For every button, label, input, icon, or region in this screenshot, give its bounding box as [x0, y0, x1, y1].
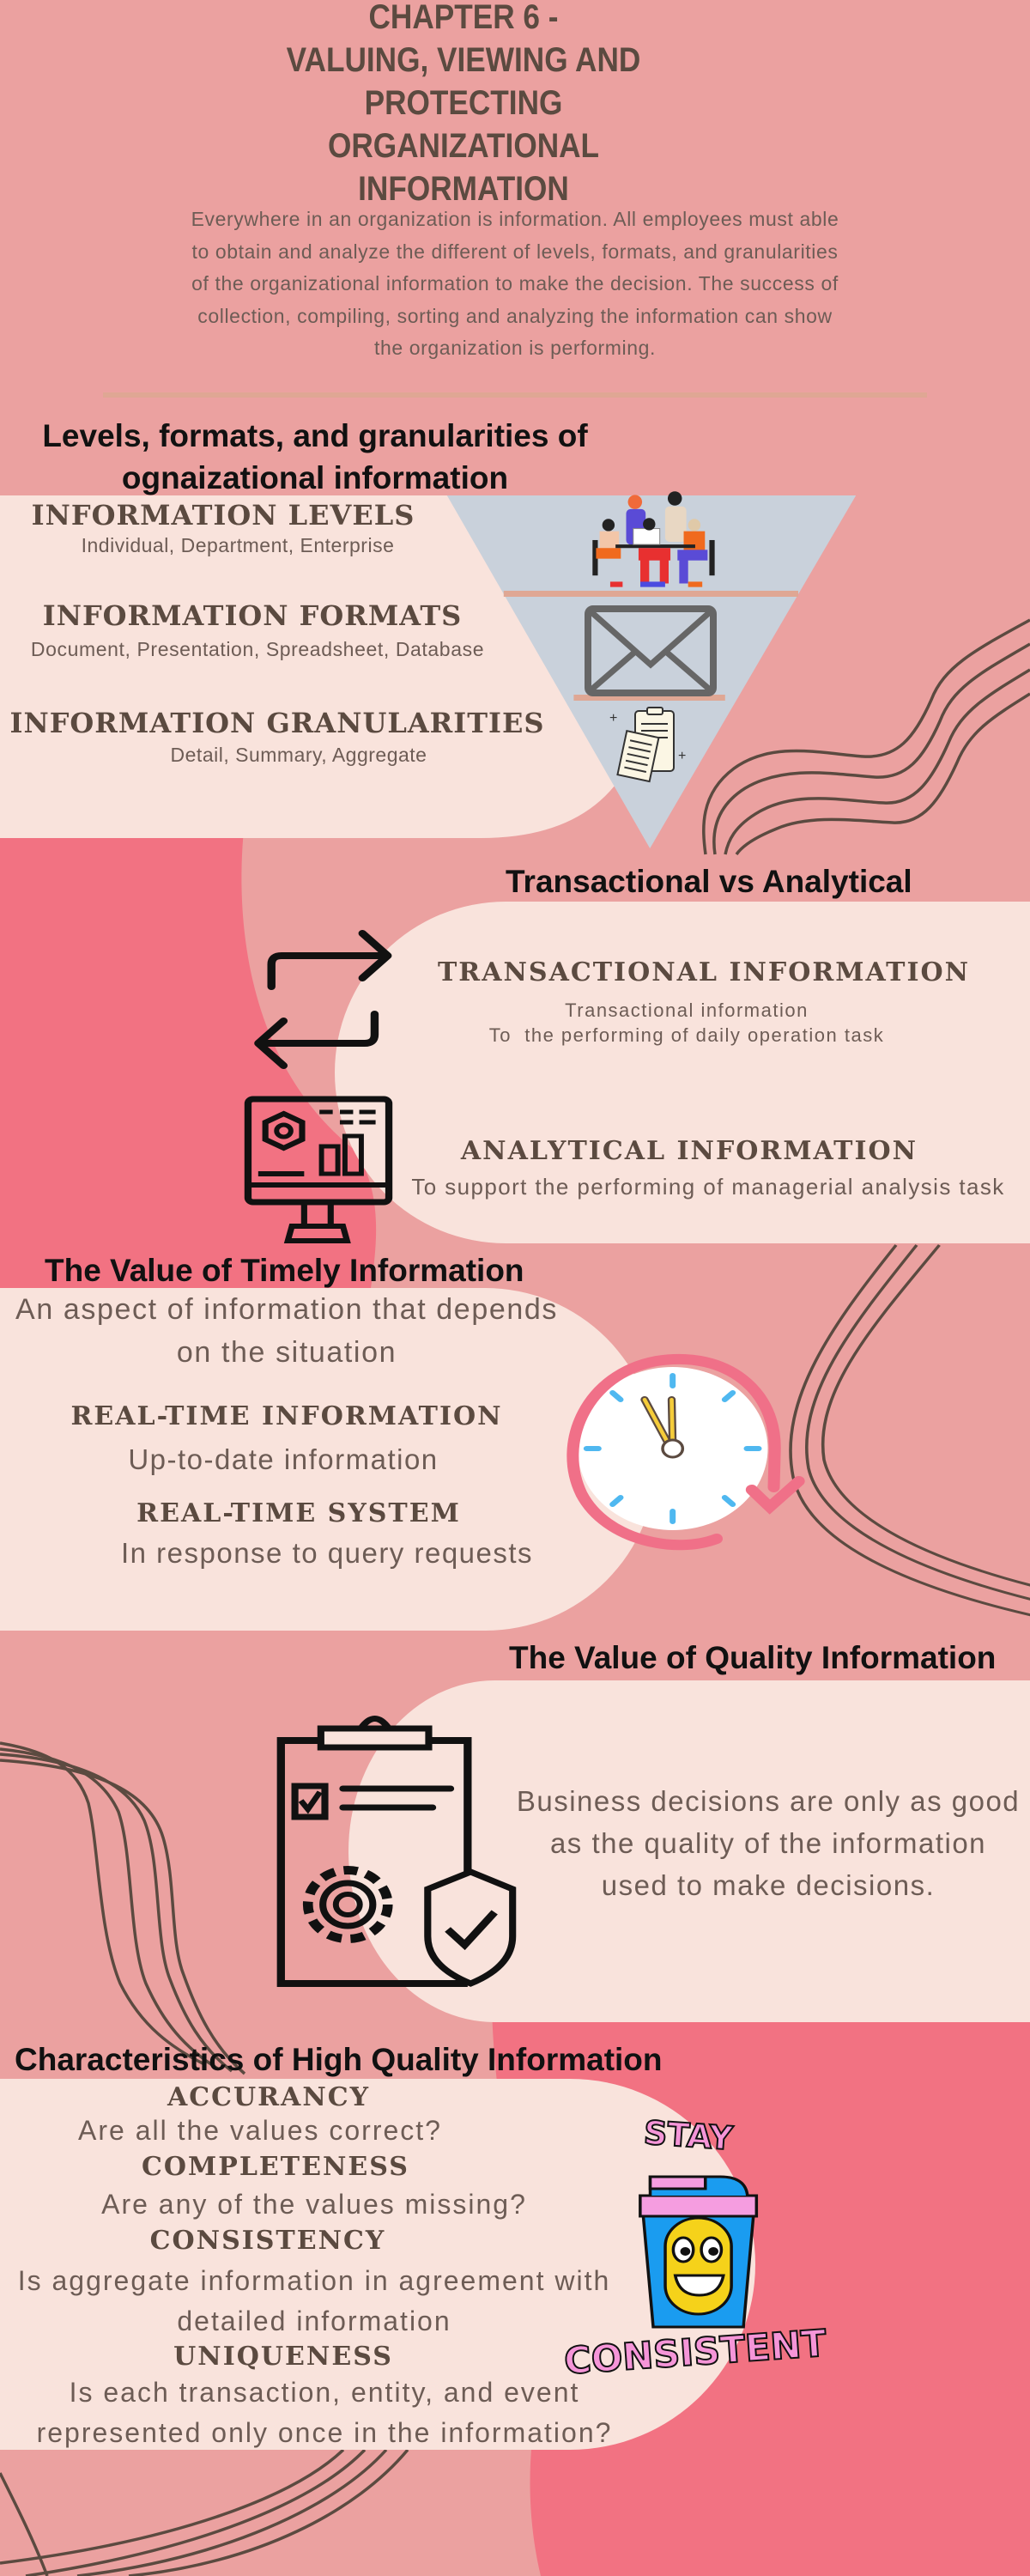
- info formats: INFORMATION FORMATS: [43, 599, 462, 632]
- transactional information: [438, 957, 970, 1046]
- quality text: as the quality of the information: [550, 1827, 986, 1859]
- heading: quality information: The Value of Quality Information: [509, 1640, 996, 1675]
- timely text: In response to query requests: [121, 1537, 533, 1569]
- completeness: COMPLETENESS: [142, 2152, 409, 2182]
- info formats: Document, Presentation, Spreadsheet, Database: [31, 638, 484, 660]
- panel: quality information: [348, 1680, 1030, 2022]
- divider: [103, 392, 927, 398]
- title: PROTECTING: [365, 84, 562, 122]
- info levels: [32, 499, 415, 556]
- transactional information: TRANSACTIONAL INFORMATION: [438, 957, 970, 987]
- title: VALUING, VIEWING AND: [287, 41, 640, 79]
- icon: clipboard: [276, 1716, 517, 1987]
- timely text: An aspect of information that depends: [15, 1293, 558, 1326]
- intro paragraph: the organization is performing.: [374, 337, 656, 359]
- title: INFORMATION: [358, 170, 569, 208]
- icon: documents: +: [609, 711, 617, 726]
- icon: documents: [609, 707, 686, 783]
- icon: documents: +: [678, 749, 686, 763]
- icon: clock: [566, 1353, 805, 1551]
- title: [287, 0, 640, 208]
- timely text: on the situation: [177, 1336, 397, 1369]
- icon: analytics monitor: [244, 1096, 393, 1243]
- transactional information: Transactional information: [565, 999, 809, 1021]
- characteristics list: Are any of the values missing?: [101, 2189, 527, 2220]
- characteristics list: Is each transaction, entity, and event: [70, 2377, 579, 2408]
- intro paragraph: Everywhere in an organization is information. All employees must able: [191, 208, 839, 230]
- heading: transactional vs analytical: Transactional vs Analytical: [506, 864, 912, 899]
- icon: envelope: [585, 605, 717, 696]
- panel: levels formats granularities: [0, 491, 856, 848]
- info granularities: [9, 707, 545, 766]
- intro paragraph: collection, compiling, sorting and analyzing the information can show: [197, 304, 833, 326]
- icon: smiling cup: [639, 2176, 759, 2329]
- characteristics list: [18, 2082, 612, 2448]
- timely text: [15, 1293, 558, 1569]
- panel: transactional vs analytical: [335, 902, 1030, 1243]
- accuracy: ACCURANCY: [167, 2082, 370, 2112]
- icon: exchange arrows: [254, 930, 391, 1069]
- characteristics list: detailed information: [177, 2306, 451, 2336]
- panel: timely information: [0, 1288, 657, 1631]
- timely text: Up-to-date information: [128, 1443, 439, 1475]
- heading: characteristics: Characteristics of High Quality Information: [15, 2042, 663, 2077]
- quality text: Business decisions are only as good: [517, 1785, 1020, 1817]
- analytical information: To support the performing of managerial analysis task: [411, 1174, 1005, 1200]
- consistency: CONSISTENCY: [150, 2226, 385, 2256]
- sticker: stay consistent: CONSISTENT: [563, 2322, 827, 2384]
- info formats: [31, 599, 484, 660]
- real-time information: REAL-TIME INFORMATION: [70, 1401, 503, 1431]
- heading: levels: Levels, formats, and granularities of: [42, 418, 588, 453]
- info levels: Individual, Department, Enterprise: [82, 534, 394, 556]
- analytical information: ANALYTICAL INFORMATION: [461, 1136, 918, 1166]
- sticker: stay consistent: [563, 2113, 827, 2384]
- info granularities: INFORMATION GRANULARITIES: [9, 707, 545, 739]
- characteristics list: represented only once in the information?: [37, 2417, 612, 2448]
- quality text: used to make decisions.: [602, 1869, 935, 1901]
- heading: levels: [42, 418, 588, 495]
- info granularities: Detail, Summary, Aggregate: [171, 744, 427, 766]
- real-time system: REAL-TIME SYSTEM: [136, 1498, 461, 1528]
- characteristics list: Is aggregate information in agreement with: [18, 2265, 610, 2296]
- info levels: INFORMATION LEVELS: [32, 499, 415, 532]
- intro paragraph: to obtain and analyze the different of levels, formats, and granularities: [192, 240, 838, 263]
- sticker: stay consistent: STAY: [643, 2113, 734, 2158]
- intro paragraph: [191, 208, 839, 359]
- uniqueness: UNIQUENESS: [173, 2342, 393, 2372]
- panel: characteristics: [0, 2079, 755, 2450]
- icon: team meeting: [592, 491, 715, 587]
- quality text: [517, 1785, 1020, 1901]
- intro paragraph: of the organizational information to make the decision. The success of: [191, 272, 839, 295]
- heading: levels: ognaizational information: [122, 460, 508, 495]
- heading: timely information: The Value of Timely Information: [45, 1253, 524, 1288]
- characteristics list: Are all the values correct?: [78, 2115, 442, 2146]
- analytical information: [411, 1136, 1005, 1200]
- title: ORGANIZATIONAL: [328, 127, 599, 165]
- transactional information: To the performing of daily operation task: [489, 1024, 884, 1046]
